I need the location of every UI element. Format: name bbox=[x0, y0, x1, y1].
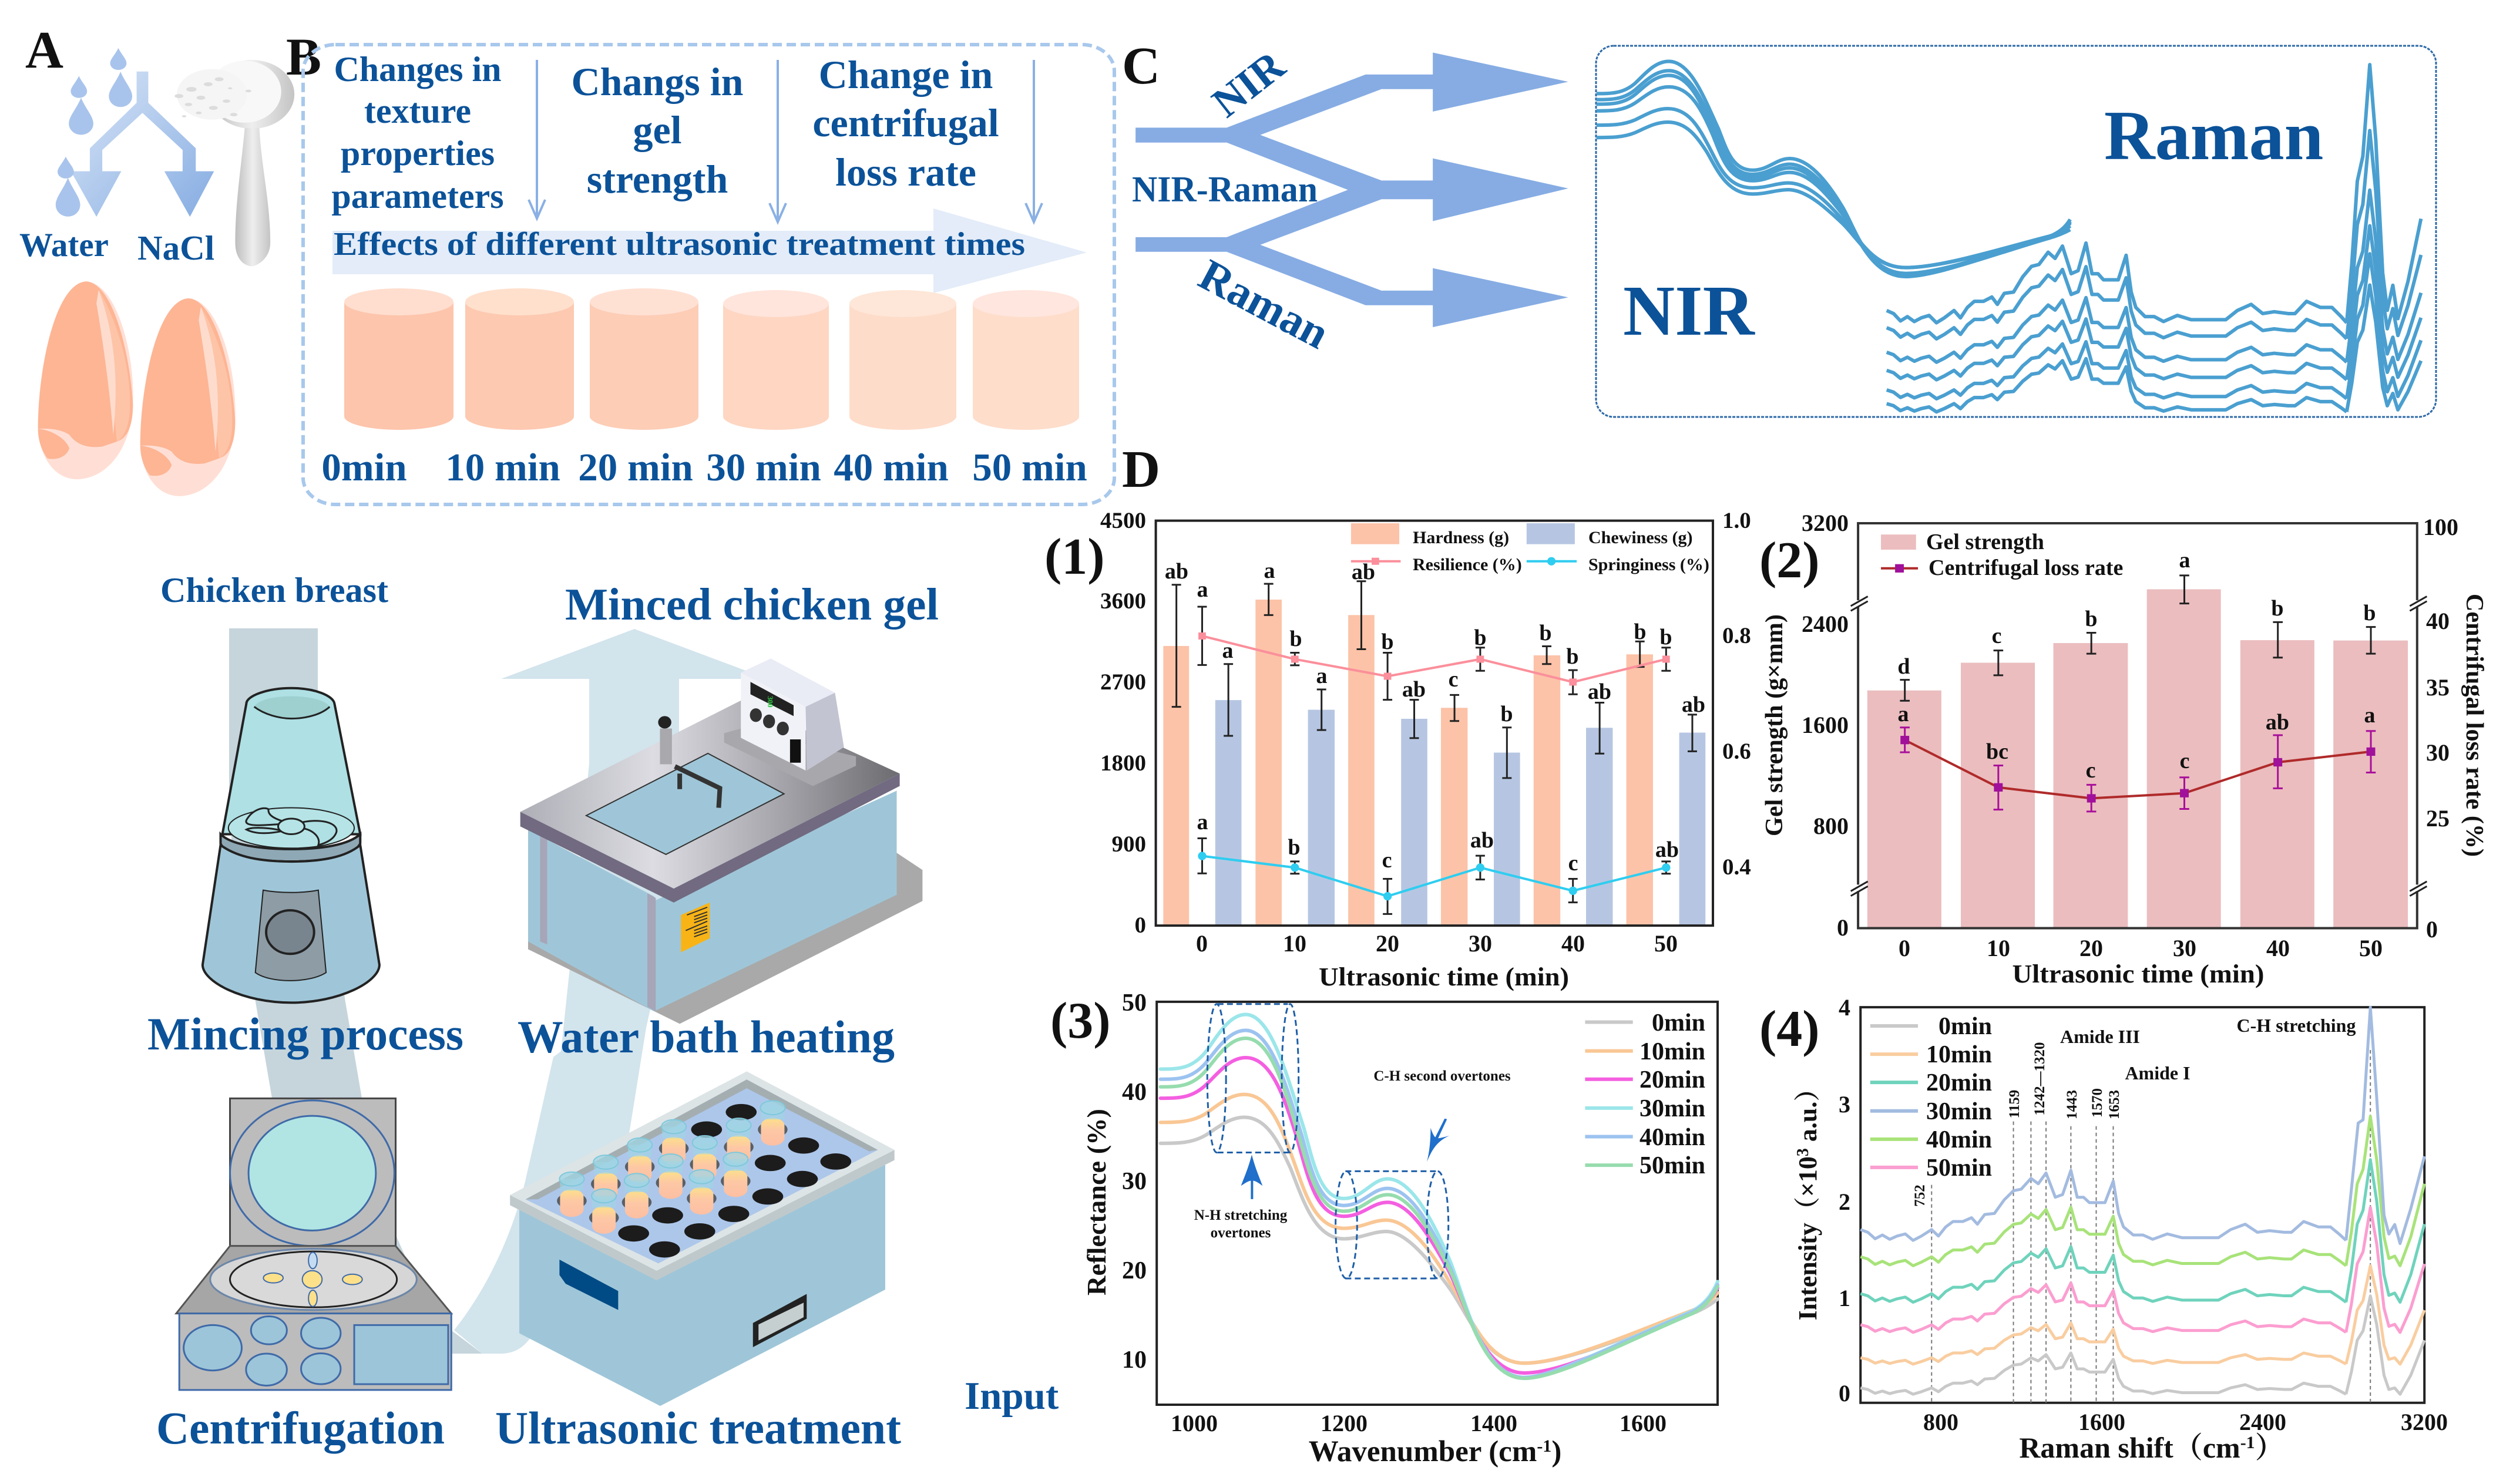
label: Water: Water bbox=[19, 227, 109, 264]
time labels: 40 min bbox=[834, 446, 949, 489]
x axis ticks: 50 bbox=[2359, 935, 2383, 961]
legend text bbox=[1926, 1013, 1992, 1182]
panel number (3): (3) bbox=[1050, 992, 1111, 1049]
legend text: 50min bbox=[1639, 1152, 1705, 1179]
icon: branching arrows, water drops, spoon and chicken breasts bbox=[38, 48, 294, 496]
icon: ultrasonic bath with tubes bbox=[510, 1071, 895, 1406]
heading: texture properties: Changes in bbox=[334, 50, 502, 89]
legend text: 10min bbox=[1639, 1038, 1705, 1065]
y axis ticks: 40 bbox=[1122, 1079, 1147, 1106]
significance letters: b bbox=[1634, 620, 1647, 644]
x axis ticks: 30 bbox=[1469, 930, 1492, 957]
letter A: A bbox=[25, 21, 63, 79]
heading: gel strength: Changs in bbox=[572, 59, 743, 104]
x axis ticks bbox=[1923, 1409, 2448, 1435]
heading: gel strength bbox=[572, 59, 743, 201]
icon: blender bbox=[203, 688, 379, 1002]
x axis ticks bbox=[1196, 930, 1678, 957]
label: NIR-Raman: NIR-Raman bbox=[1132, 170, 1318, 210]
legend text bbox=[1413, 528, 1709, 574]
legend text: Chewiness (g) bbox=[1588, 528, 1693, 547]
left axis ticks: 3600 bbox=[1100, 588, 1146, 614]
chart 2: gel strength and centrifugal loss bbox=[1759, 510, 2488, 988]
x axis ticks: 3200 bbox=[2401, 1409, 2448, 1435]
y axis ticks: 4 bbox=[1839, 994, 1850, 1021]
chart 4: Raman spectra bbox=[1759, 994, 2448, 1464]
heading: gel strength: strength bbox=[587, 157, 728, 201]
significance letters: b bbox=[1539, 621, 1552, 645]
significance letters: a bbox=[1222, 638, 1234, 663]
significance letters: ab bbox=[1165, 559, 1188, 584]
significance letters bbox=[1897, 548, 2376, 783]
display reading: 300 bbox=[766, 696, 775, 708]
right axis ticks: 0.4 bbox=[1722, 854, 1751, 880]
legend text bbox=[1639, 1009, 1705, 1179]
significance letters: ab bbox=[1352, 560, 1375, 584]
letter C: C bbox=[1122, 37, 1160, 95]
significance letters: b bbox=[2363, 601, 2376, 625]
wavenumber peak labels: 1443 bbox=[2064, 1090, 2080, 1119]
significance letters: b bbox=[1289, 627, 1302, 651]
label: Centrifugation: Centrifugation bbox=[156, 1402, 445, 1453]
x axis ticks bbox=[1171, 1410, 1667, 1436]
annotation text bbox=[1194, 1068, 1511, 1241]
icon: centrifuge bbox=[176, 1098, 451, 1390]
y axis ticks bbox=[1122, 990, 1147, 1374]
right axis title: Centrifugal loss rate (%) bbox=[2461, 594, 2488, 857]
arrow caption: Effects of different ultrasonic treatment times bbox=[334, 226, 1025, 263]
dashed frame bbox=[303, 45, 1114, 504]
right axis ticks: 25 bbox=[2426, 805, 2450, 832]
legend text: 30min bbox=[1639, 1095, 1705, 1122]
significance letters: a bbox=[2179, 548, 2190, 573]
x axis ticks: 10 bbox=[1987, 935, 2010, 961]
heading: texture properties: parameters bbox=[331, 177, 504, 216]
significance letters: a bbox=[1897, 702, 1909, 726]
right axis ticks: 40 bbox=[2426, 608, 2450, 634]
x axis title: Raman shift（cm bbox=[2019, 1431, 2240, 1464]
legend text: 50min bbox=[1926, 1155, 1992, 1182]
significance letters: c bbox=[1568, 851, 1578, 876]
heading: centrifugal loss rate: centrifugal bbox=[812, 100, 999, 145]
heading: Minced chicken gel: Minced chicken gel bbox=[565, 579, 939, 630]
left axis ticks bbox=[1100, 508, 1146, 938]
y axis ticks: 0 bbox=[1839, 1380, 1850, 1406]
y axis title: Reflectance (%) bbox=[1081, 1109, 1111, 1295]
left axis ticks: 1600 bbox=[1802, 712, 1849, 738]
panel number (2): (2) bbox=[1759, 532, 1820, 589]
time labels: 10 min bbox=[445, 446, 560, 489]
x axis ticks: 0 bbox=[1899, 935, 1910, 961]
x axis ticks: 2400 bbox=[2239, 1409, 2286, 1435]
heading: texture properties bbox=[331, 50, 504, 216]
letter D: D bbox=[1122, 440, 1160, 499]
left axis ticks: 800 bbox=[1813, 813, 1849, 839]
y axis title: a.u.） bbox=[1793, 1076, 1822, 1148]
letter B: B bbox=[286, 28, 321, 86]
left axis ticks: 1800 bbox=[1100, 751, 1146, 776]
x axis ticks bbox=[1899, 935, 2383, 961]
significance letters: b bbox=[1288, 835, 1301, 860]
icon: water bath bbox=[520, 658, 922, 1024]
significance letters: c bbox=[1382, 848, 1392, 873]
significance letters: a bbox=[1316, 664, 1328, 688]
legend text: Centrifugal loss rate bbox=[1929, 556, 2123, 580]
axes, reference lines and curves bbox=[1860, 1007, 2424, 1403]
wavenumber peak labels: 1653 bbox=[2106, 1090, 2122, 1119]
right axis ticks: 0 bbox=[2426, 916, 2438, 943]
gel cylinders bbox=[344, 288, 1079, 430]
significance letters: ab bbox=[1682, 692, 1705, 717]
label: Raman large: Raman bbox=[2104, 96, 2323, 174]
left axis title: Gel strength (g×mm) bbox=[1761, 614, 1788, 836]
x axis ticks: 800 bbox=[1923, 1409, 1958, 1435]
y axis ticks: 50 bbox=[1122, 990, 1147, 1017]
y axis ticks: 10 bbox=[1122, 1347, 1147, 1374]
x axis ticks: 20 bbox=[1376, 930, 1399, 957]
x axis ticks: 50 bbox=[1654, 930, 1678, 957]
x axis ticks: 1400 bbox=[1470, 1410, 1517, 1436]
significance letters: b bbox=[1381, 630, 1394, 654]
panel A: raw materials bbox=[19, 21, 294, 496]
bars, error bars and line bbox=[1851, 523, 2427, 928]
x axis title: Ultrasonic time (min) bbox=[1319, 963, 1569, 991]
y axis ticks: 1 bbox=[1839, 1285, 1850, 1311]
x axis ticks: 10 bbox=[1283, 930, 1306, 957]
panel C: NIR and Raman spectra fusion bbox=[1122, 37, 2436, 417]
flow arrow: light blue up to minced chicken gel bbox=[454, 629, 768, 1354]
bars, error bars and lines bbox=[1156, 521, 1713, 926]
y axis title: 3 bbox=[1794, 1148, 1812, 1156]
annotation text: C-H second overtones bbox=[1373, 1068, 1511, 1084]
significance letters: b bbox=[1659, 625, 1672, 650]
x axis title: Ultrasonic time (min) bbox=[2013, 960, 2264, 988]
heading: centrifugal loss rate: loss rate bbox=[835, 150, 976, 194]
label: Ultrasonic treatment: Ultrasonic treatment bbox=[495, 1402, 901, 1453]
significance letters: a bbox=[1264, 558, 1275, 583]
x axis ticks: 1000 bbox=[1171, 1410, 1218, 1436]
right axis ticks: 1.0 bbox=[1722, 508, 1751, 533]
legend text: 10min bbox=[1926, 1041, 1992, 1068]
legend text: 40min bbox=[1926, 1126, 1992, 1153]
significance letters: c bbox=[2086, 758, 2095, 783]
significance letters: bc bbox=[1986, 739, 2008, 764]
legend text: 30min bbox=[1926, 1098, 1992, 1125]
left axis ticks: 4500 bbox=[1100, 508, 1146, 533]
significance letters: c bbox=[1992, 624, 2001, 648]
significance letters: b bbox=[2085, 607, 2098, 631]
left axis ticks: 0 bbox=[1837, 914, 1849, 941]
annotation text: overtones bbox=[1211, 1225, 1271, 1241]
label: NIR large: NIR bbox=[1623, 271, 1756, 351]
right axis ticks: 0.8 bbox=[1722, 623, 1751, 648]
significance letters: c bbox=[2180, 749, 2189, 773]
legend text: 40min bbox=[1639, 1124, 1705, 1151]
label: Raman rotated: Raman bbox=[1191, 250, 1337, 359]
heading: centrifugal loss rate: Change in bbox=[819, 52, 993, 97]
band annotations: C-H stretching bbox=[2237, 1015, 2356, 1036]
y axis title: Intensity（×10 bbox=[1793, 1156, 1822, 1320]
significance letters: a bbox=[1197, 810, 1208, 834]
right axis ticks bbox=[2423, 514, 2458, 943]
left axis ticks: 900 bbox=[1111, 832, 1146, 857]
label: NIR rotated: NIR bbox=[1204, 41, 1294, 126]
left axis ticks: 0 bbox=[1135, 913, 1146, 938]
x axis ticks: 1600 bbox=[2078, 1409, 2125, 1435]
NIR spectra lines bbox=[1597, 61, 2070, 277]
left axis ticks: 2700 bbox=[1100, 669, 1146, 695]
x axis title: ) bbox=[1551, 1435, 1561, 1468]
y axis ticks bbox=[1839, 994, 1850, 1406]
x axis title: -1 bbox=[2240, 1433, 2255, 1452]
left axis ticks bbox=[1802, 510, 1849, 941]
time labels bbox=[321, 446, 1087, 489]
big arrow bbox=[332, 208, 1087, 293]
flow band: grey-blue bbox=[229, 628, 482, 1354]
left axis ticks: 3200 bbox=[1802, 510, 1849, 536]
thin arrows bbox=[529, 60, 1042, 222]
wavenumber peak labels bbox=[1912, 1042, 2122, 1207]
y axis ticks: 20 bbox=[1122, 1257, 1147, 1284]
heading: centrifugal loss rate bbox=[812, 52, 999, 194]
wavenumber peak labels: 1570 bbox=[2089, 1088, 2105, 1118]
panel number (1): (1) bbox=[1044, 529, 1105, 585]
significance letters: ab bbox=[1402, 677, 1426, 702]
legend text: 20min bbox=[1926, 1069, 1992, 1096]
x axis ticks: 40 bbox=[2266, 935, 2290, 961]
panel B: effects of ultrasonic treatment times bbox=[286, 28, 1114, 504]
x axis title: -1 bbox=[1537, 1436, 1551, 1456]
right axis ticks bbox=[1722, 508, 1751, 880]
legend text: Gel strength bbox=[1926, 530, 2044, 554]
band annotations: Amide I bbox=[2125, 1062, 2190, 1083]
wavenumber peak labels: 1159 bbox=[2007, 1090, 2022, 1118]
significance letters: d bbox=[1897, 654, 1910, 679]
x axis ticks: 30 bbox=[2173, 935, 2196, 961]
significance letters: a bbox=[2364, 703, 2376, 728]
panel number (4): (4) bbox=[1759, 1001, 1820, 1058]
label: Water bath heating: Water bath heating bbox=[518, 1011, 895, 1062]
label: Mincing process: Mincing process bbox=[147, 1008, 463, 1059]
chart 3: NIR spectra bbox=[1050, 990, 1718, 1468]
time labels: 50 min bbox=[972, 446, 1087, 489]
x axis ticks: 20 bbox=[2079, 935, 2103, 961]
right axis ticks: 100 bbox=[2423, 514, 2458, 540]
legend text: 0min bbox=[1938, 1013, 1992, 1040]
x axis title: Wavenumber (cm bbox=[1309, 1435, 1537, 1468]
legend text: 0min bbox=[1652, 1009, 1705, 1037]
heading: texture properties: texture bbox=[364, 92, 471, 130]
time labels: 30 min bbox=[706, 446, 821, 489]
label: Input: Input bbox=[965, 1374, 1059, 1418]
x axis ticks: 1600 bbox=[1620, 1410, 1667, 1436]
spectra frame bbox=[1596, 46, 2436, 417]
legend text bbox=[1926, 530, 2123, 580]
heading: Chicken breast: Chicken breast bbox=[160, 571, 388, 610]
wavenumber peak labels: 1242—1320 bbox=[2032, 1042, 2048, 1116]
right axis ticks: 30 bbox=[2426, 739, 2450, 766]
Raman spectra lines bbox=[1887, 65, 2421, 412]
legend text: 20min bbox=[1639, 1066, 1705, 1093]
y axis ticks: 3 bbox=[1839, 1091, 1850, 1118]
significance letters: ab bbox=[2266, 710, 2289, 735]
significance letters: b bbox=[1566, 644, 1579, 669]
band annotations: Amide III bbox=[2060, 1026, 2140, 1047]
wavenumber peak labels: 752 bbox=[1912, 1184, 1928, 1207]
chart 1: texture properties bbox=[1044, 508, 1751, 991]
significance letters: b bbox=[2271, 596, 2284, 621]
significance letters: a bbox=[1197, 577, 1208, 602]
significance letters: b bbox=[1474, 625, 1487, 650]
heading: texture properties: properties bbox=[341, 134, 495, 173]
axes, curves and annotations bbox=[1157, 1002, 1718, 1405]
label: NaCl: NaCl bbox=[137, 228, 214, 267]
significance letters: c bbox=[1449, 667, 1458, 692]
branching arrows bbox=[1135, 53, 1568, 327]
significance letters: ab bbox=[1588, 679, 1611, 704]
band annotations bbox=[2060, 1015, 2356, 1083]
x axis ticks: 40 bbox=[1561, 930, 1585, 957]
heading: gel strength: gel bbox=[633, 107, 682, 152]
y axis ticks: 2 bbox=[1839, 1189, 1850, 1215]
time labels: 20 min bbox=[578, 446, 693, 489]
panel: sample preparation flow bbox=[147, 571, 1059, 1453]
time labels: 0min bbox=[321, 446, 407, 489]
significance letters: b bbox=[1500, 702, 1513, 726]
x axis ticks: 0 bbox=[1196, 930, 1208, 957]
right axis ticks: 0.6 bbox=[1722, 739, 1751, 764]
left axis ticks: 2400 bbox=[1802, 611, 1849, 637]
y axis ticks: 30 bbox=[1122, 1168, 1147, 1195]
significance letters bbox=[1165, 558, 1705, 876]
x axis title: ） bbox=[2255, 1431, 2284, 1464]
significance letters: ab bbox=[1655, 837, 1679, 862]
significance letters: ab bbox=[1470, 828, 1494, 853]
annotation text: N-H stretching bbox=[1194, 1207, 1288, 1223]
legend text: Hardness (g) bbox=[1413, 528, 1509, 547]
legend text: Resilience (%) bbox=[1413, 555, 1522, 574]
legend text: Springiness (%) bbox=[1588, 555, 1709, 574]
x axis ticks: 1200 bbox=[1321, 1410, 1368, 1436]
right axis ticks: 35 bbox=[2426, 674, 2450, 701]
